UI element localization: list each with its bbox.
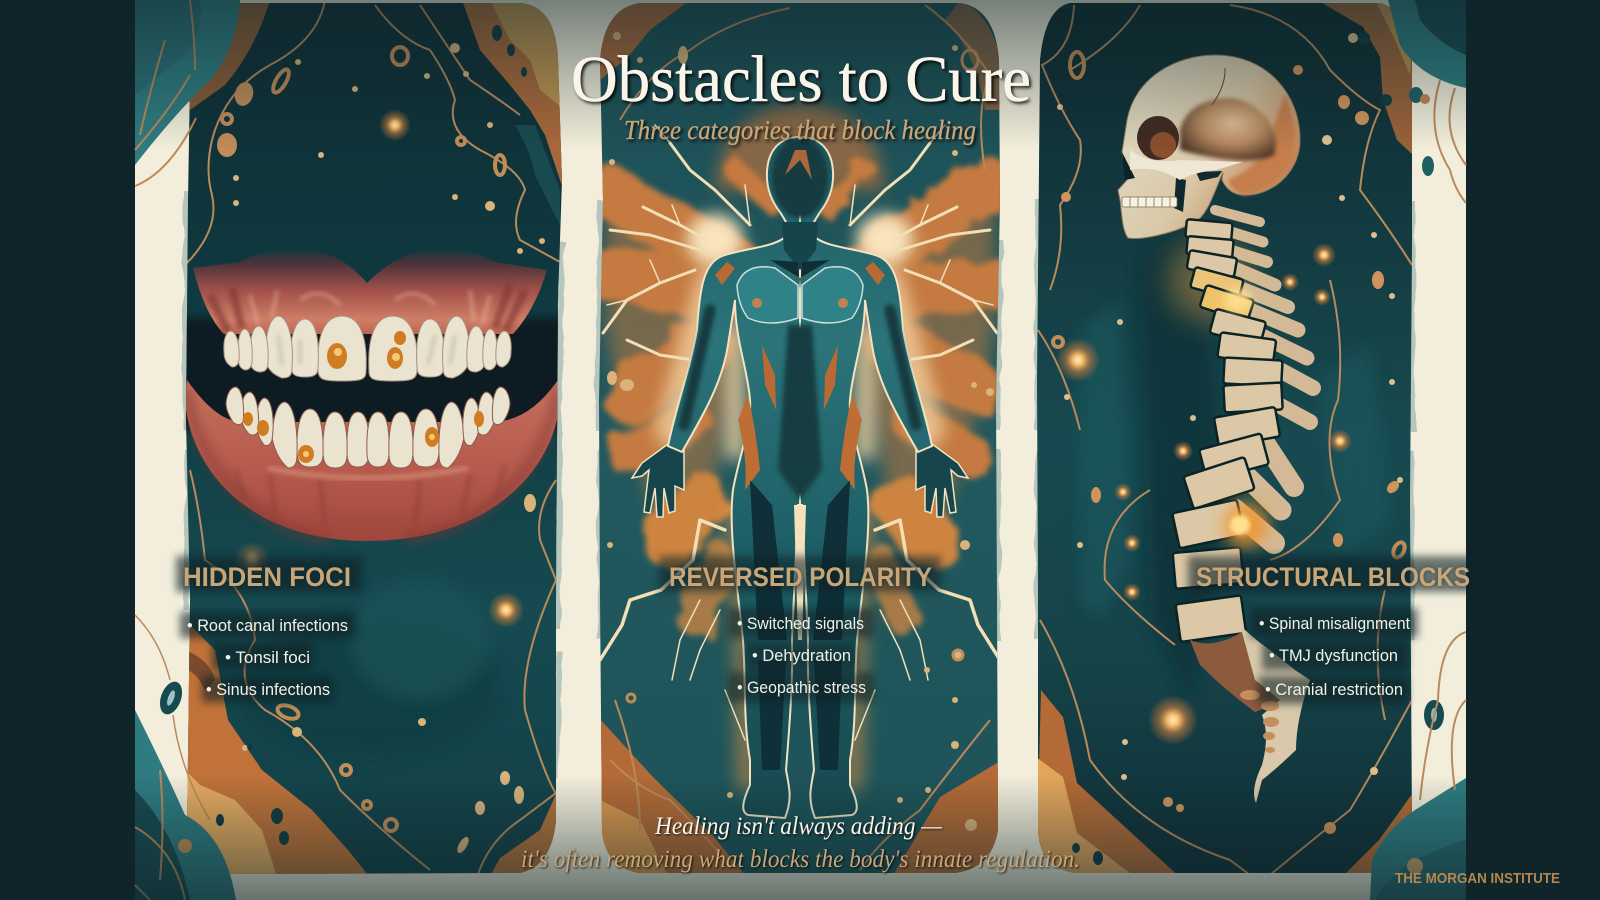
list: structural blocks items: • Cranial restriction — [1265, 681, 1403, 699]
closing quote: it's often removing what blocks the body's innate regulation. — [521, 846, 1080, 873]
skull — [1118, 55, 1300, 238]
column: hidden foci text — [176, 556, 362, 702]
list: hidden foci items — [187, 617, 348, 699]
decorative corner: bottom right swoosh — [1370, 632, 1466, 900]
list: reversed polarity items: • Geopathic stress — [737, 679, 866, 697]
list: reversed polarity items — [737, 615, 866, 697]
vines and glowing orbs — [1038, 5, 1412, 875]
human figure — [632, 137, 968, 818]
column: structural blocks text — [1188, 556, 1480, 704]
list: hidden foci items: • Root canal infections — [187, 617, 348, 635]
column: reversed polarity text — [659, 556, 941, 702]
lower lip — [185, 380, 560, 541]
subtitle: Three categories that block healing — [624, 115, 976, 145]
list: structural blocks items: • Spinal misalignment — [1259, 615, 1410, 633]
spine — [1168, 210, 1313, 803]
vines and dots — [607, 5, 994, 870]
upper teeth — [224, 316, 511, 381]
bottom corners — [601, 720, 744, 873]
decorative corner: bottom left swoosh — [135, 615, 236, 900]
closing quote — [521, 813, 1080, 873]
list: structural blocks items: • TMJ dysfunction — [1269, 647, 1398, 665]
footer brand: THE MORGAN INSTITUTE — [1395, 870, 1560, 887]
heading: hidden foci: HIDDEN FOCI — [183, 562, 351, 592]
panel: reversed polarity illustration — [595, 0, 1005, 880]
list: reversed polarity items: • Switched signals — [737, 615, 864, 633]
upper gum — [170, 249, 580, 430]
panel: hidden foci illustration — [170, 0, 580, 880]
title: Obstacles to Cure — [571, 43, 1031, 116]
lower teeth — [226, 387, 510, 468]
orange energy aura — [604, 105, 996, 780]
heading: structural blocks: STRUCTURAL BLOCKS — [1196, 562, 1470, 592]
list: structural blocks items — [1259, 615, 1410, 699]
decay spots — [243, 331, 484, 463]
list: hidden foci items: • Sinus infections — [206, 681, 330, 699]
panel: structural blocks illustration — [1032, 0, 1417, 880]
decorative corner: top left swoosh — [135, 0, 240, 186]
lightning — [600, 125, 1000, 740]
list: reversed polarity items: • Dehydration — [752, 647, 851, 665]
closing quote: Healing isn't always adding — — [654, 813, 943, 840]
heading: reversed polarity: REVERSED POLARITY — [669, 562, 932, 592]
decorative corner: top right swoosh — [1388, 0, 1466, 203]
vines and dots — [185, 0, 560, 874]
list: hidden foci items: • Tonsil foci — [225, 649, 310, 667]
